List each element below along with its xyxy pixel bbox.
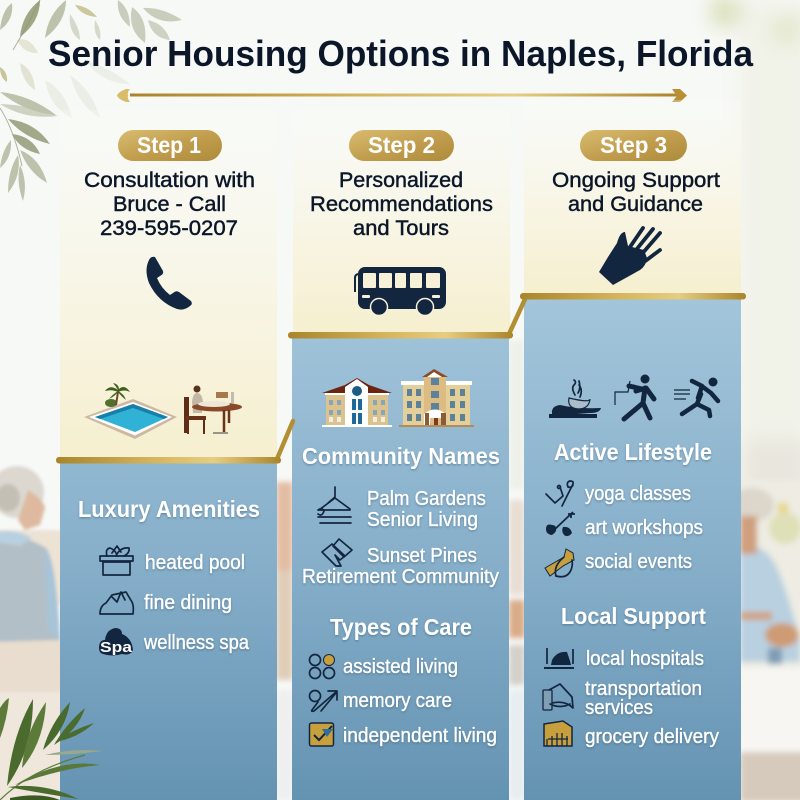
panel: step 1 header backdrop [60,110,277,460]
icon: sunset pines building [399,369,474,427]
icon: dining table [184,386,242,434]
step 3 badge [580,130,687,161]
icon: sunset pines [322,539,352,566]
icon: running figure [674,378,718,416]
step 2 badge: Step 2 [368,132,435,158]
icon: gift basket [100,546,133,575]
step 3 badge: Step 3 [600,132,667,158]
step 3 description [552,169,720,216]
title: Senior Housing Options in Naples, Florida [48,33,754,74]
panel text: active lifestyle: art workshops [585,517,703,539]
gold stair line [56,293,746,464]
icon: transportation [543,684,573,710]
arrow: progress [117,89,687,102]
panel: step 3 header backdrop [524,100,741,295]
icon: swimming pool [84,383,177,439]
step 1 description: Consultation with [84,169,255,192]
step 1 description: Bruce - Call [113,193,226,216]
icon: spa: Spa [100,639,133,656]
panel text: community names: Senior Living [367,509,478,531]
icon: hot cup [549,380,601,418]
icon: bus [355,267,446,316]
panel: step 2 header backdrop [293,110,510,335]
icon: independent living check [310,723,334,746]
right scene [740,480,800,670]
icon: assisted living circles [310,654,334,678]
bottom-left palm [0,698,102,800]
step 1 badge [118,130,222,161]
panel: step 2 column [292,337,509,800]
panel text: community names: Community Names [302,443,500,469]
panel text: active lifestyle: Active Lifestyle [554,439,712,465]
step 1 description: 239-595-0207 [100,217,238,240]
panel text: active lifestyle: yoga classes [585,483,691,505]
step 2 description [310,169,493,240]
panel text: community names: assisted living [343,656,458,678]
panel text: active lifestyle: services [585,697,653,719]
panel text: luxury amenities: Luxury Amenities [78,496,260,522]
icon: memory care arrows [310,690,337,711]
top-left foliage [0,0,182,201]
step 1 badge: Step 1 [137,132,201,158]
panel: step 3 column [524,298,741,800]
icon: yoga [546,481,573,506]
panel text: community names: Types of Care [330,614,472,640]
step 3 description: and Guidance [568,193,703,216]
panel text: luxury amenities: heated pool [145,552,245,574]
panel: step 1 column [60,462,277,800]
icon: palm gardens [318,487,351,523]
icon: social events [545,549,574,577]
icon: dining basket [100,592,133,614]
panel text: community names: Retirement Community [302,566,499,588]
icon: spa [99,628,133,656]
icon: palm tree [105,383,130,407]
icon: walking figure [615,374,654,419]
icon: hospital bed [544,648,574,668]
panel text: community names: Sunset Pines [367,545,477,567]
middle-left gap [276,482,293,570]
icon: grocery store [544,721,572,746]
step 2 description: and Tours [353,217,449,240]
panel text: luxury amenities: fine dining [144,592,232,614]
panel text: community names: independent living [343,725,497,747]
icon: palm gardens building [322,378,392,427]
middle-right gap [509,340,525,490]
step 2 description: Personalized [339,169,463,192]
panel text: active lifestyle: social events [585,551,692,573]
panel text: active lifestyle: transportation [585,678,702,700]
step 3 description: Ongoing Support [552,169,720,192]
step 2 badge [349,130,454,161]
left scene: sofa and woman [0,530,65,605]
icon: phone [146,257,192,310]
panel text: community names: Palm Gardens [367,488,486,510]
step 1 description [84,169,255,240]
panel text: active lifestyle: local hospitals [586,648,704,670]
panel text: community names [302,443,500,747]
panel text: active lifestyle [554,439,719,748]
step 2 description: Recommendations [310,193,493,216]
icon: hand [599,228,660,285]
panel text: active lifestyle: grocery delivery [585,726,719,748]
panel text: community names: memory care [343,690,452,712]
panel text: active lifestyle: Local Support [561,603,706,629]
panel text: luxury amenities [78,496,260,654]
panel text: luxury amenities: wellness spa [143,632,250,654]
icon: art tools [546,512,575,536]
